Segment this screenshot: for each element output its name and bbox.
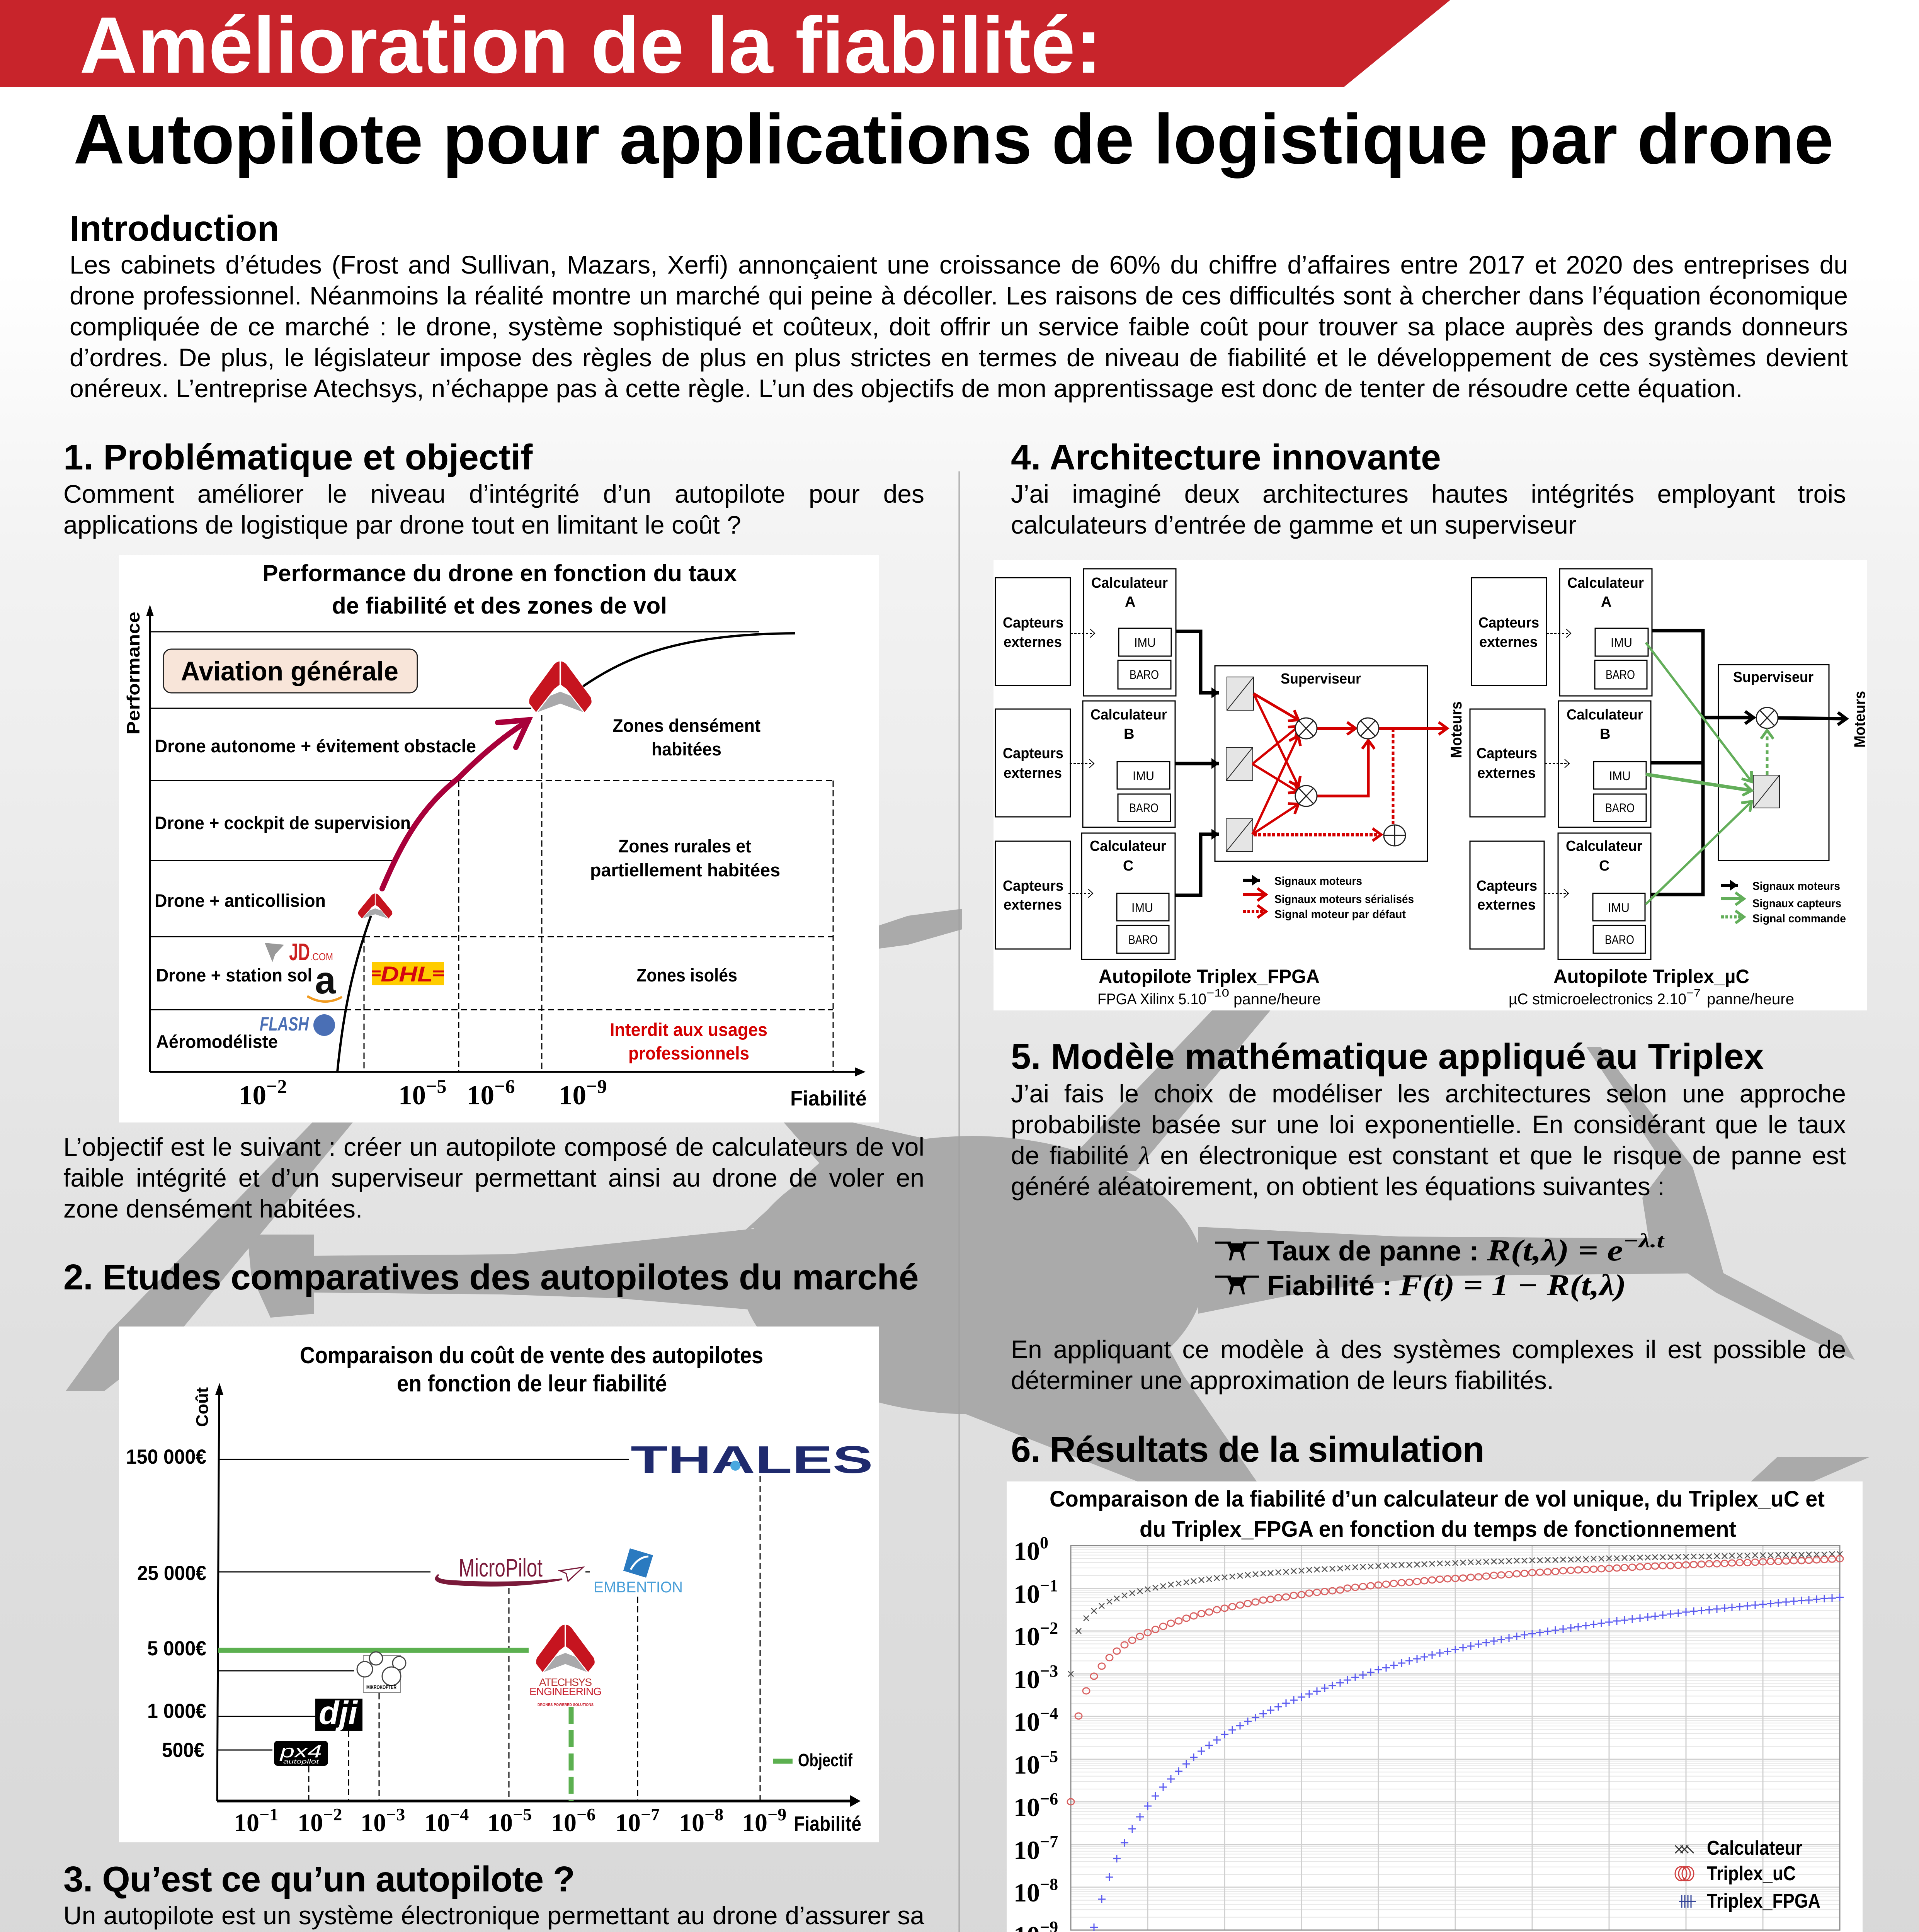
diagram: architectures triplex: BARO xyxy=(1605,933,1634,947)
legend objectif: Objectif xyxy=(798,1750,853,1770)
diagram: architectures triplex: BARO xyxy=(1130,668,1159,682)
chart: performance du drone: Drone + anticollision xyxy=(155,890,326,911)
chart: coût des autopilotes: 25 000€ xyxy=(137,1562,206,1585)
chart: performance du drone: Fiabilité xyxy=(790,1087,867,1110)
chart: coût des autopilotes: Comparaison du coût de vente des autopilotes xyxy=(300,1342,763,1368)
text: section 4 xyxy=(1011,478,1846,540)
autopilot brand logos: autopilot xyxy=(283,1759,319,1765)
y axis labels: 10 xyxy=(1014,1835,1040,1865)
series triplex uC xyxy=(1071,1559,1840,1802)
legend right: Signaux capteurs xyxy=(1752,897,1841,910)
diagram: architectures triplex: BARO xyxy=(1605,801,1635,815)
text: introduction: onéreux. L’entreprise Atechsys, n’échappe pas à cette règle. L’un des objectifs de mon apprentissage est donc de tenter de résoudre cette équation. xyxy=(70,374,1743,403)
chart: coût des autopilotes: 10 xyxy=(234,1809,259,1837)
chart: coût des autopilotes: −9 xyxy=(767,1804,786,1824)
diagram: architectures triplex: BARO xyxy=(1606,668,1635,682)
background drone silhouette xyxy=(66,909,1870,1492)
y axis labels: 10 xyxy=(1014,1707,1040,1736)
chart: coût des autopilotes: −6 xyxy=(577,1804,595,1824)
y axis labels: 0 xyxy=(1040,1533,1048,1552)
box labels: Calculateur xyxy=(1567,575,1644,591)
text: section 1 objective: L’objectif est le suivant : créer un autopilote composé de calculateurs de vol xyxy=(63,1133,924,1161)
chart: coût des autopilotes: −3 xyxy=(386,1804,405,1824)
chart: performance du drone: Drone + cockpit de supervision xyxy=(155,813,411,833)
y axis labels: 10 xyxy=(1014,1750,1040,1779)
diagram captions xyxy=(1097,966,1794,1008)
text: section 5 xyxy=(1011,1078,1846,1202)
diagram: architectures triplex: IMU xyxy=(1131,901,1153,915)
legend right xyxy=(1721,880,1846,925)
diagram captions: µC stmicroelectronics 2.10 xyxy=(1509,991,1686,1008)
equations: −λ.t xyxy=(1623,1230,1665,1252)
chart: coût des autopilotes: 10 xyxy=(551,1809,577,1837)
heading: section 4: 4. Architecture innovante xyxy=(1011,437,1441,477)
aviation générale label: Aviation générale xyxy=(181,656,398,686)
box labels: externes xyxy=(1004,634,1062,650)
chart: performance du drone: 10 xyxy=(559,1080,586,1111)
box labels: externes xyxy=(1004,765,1062,781)
aviation générale label xyxy=(163,649,417,693)
equations: Fiabilité : xyxy=(1267,1270,1392,1301)
equations: Taux de panne : xyxy=(1267,1236,1478,1267)
diagram captions: Autopilote Triplex_µC xyxy=(1553,966,1749,987)
diagram captions: −10 xyxy=(1206,987,1229,999)
box labels: B xyxy=(1124,726,1134,742)
text: section 5 conclusion: déterminer une approximation de leurs fiabilités. xyxy=(1011,1366,1554,1395)
autopilot brand logos: dji xyxy=(319,1695,358,1731)
diagram: architectures triplex xyxy=(994,560,1868,1010)
y axis labels: −1 xyxy=(1040,1576,1058,1595)
autopilot brand logos: DRONES POWERED SOLUTIONS xyxy=(538,1703,594,1707)
company logos on chart xyxy=(260,939,444,1036)
chart: résultats de simulation: Comparaison de la fiabilité d’un calculateur de vol unique, du Triplex_uC et xyxy=(1050,1486,1825,1512)
chart: coût des autopilotes: −5 xyxy=(513,1804,532,1824)
text: section 5 conclusion xyxy=(1011,1334,1846,1396)
y axis labels: −5 xyxy=(1040,1747,1058,1766)
y axis labels: 10 xyxy=(1014,1878,1040,1907)
box labels: Capteurs xyxy=(1477,745,1537,762)
chart: coût des autopilotes: −2 xyxy=(323,1804,342,1824)
right diagram signals xyxy=(1651,631,1846,895)
text: introduction: compliquée de ce marché : le drone, système sophistiqué et coûteux, doit offrir un service faible coût pour trouver sa place auprès des grands donneurs xyxy=(70,312,1848,341)
box labels: Capteurs xyxy=(1003,878,1063,894)
text: introduction: drone professionnel. Néanmoins la réalité montre un marché qui peine à décoller. Les raisons de ces difficultés sont à chercher dans l’équation économique xyxy=(70,281,1848,310)
chart: performance du drone: de fiabilité et des zones de vol xyxy=(332,593,667,619)
chart: performance du drone: Drone + station sol xyxy=(156,965,312,985)
chart: résultats de simulation xyxy=(1007,1481,1863,1932)
red growth arrow xyxy=(382,720,529,889)
chart: performance du drone: −2 xyxy=(266,1075,287,1097)
box labels: Calculateur xyxy=(1566,838,1642,854)
operator circles xyxy=(1295,707,1778,846)
chart legend: Triplex_uC xyxy=(1707,1862,1796,1885)
autopilot brand logos: ATECHSYS xyxy=(539,1676,592,1688)
chart: coût des autopilotes: −8 xyxy=(704,1804,723,1824)
y axis labels: −3 xyxy=(1040,1662,1058,1680)
chart: performance du drone: professionnels xyxy=(628,1043,749,1063)
title line 1: Amélioration de la fiabilité: xyxy=(80,0,1102,90)
text: section 5 conclusion: En appliquant ce modèle à des systèmes complexes il est possible de xyxy=(1011,1335,1846,1364)
chart: performance du drone: −6 xyxy=(494,1075,515,1097)
autopilot brand logos: px4 xyxy=(279,1741,322,1761)
box labels: externes xyxy=(1479,634,1538,650)
y axis labels: −6 xyxy=(1040,1789,1058,1808)
chart: performance du drone: Zones isolés xyxy=(636,965,737,985)
box labels: Capteurs xyxy=(1478,615,1539,631)
chart: performance du drone: Aéromodéliste xyxy=(156,1031,278,1052)
chart legend: Calculateur xyxy=(1707,1837,1802,1859)
text: section 1 objective: faible intégrité et d’un superviseur permettant ainsi au drone de voler en xyxy=(63,1163,924,1192)
chart: coût des autopilotes: 10 xyxy=(361,1809,386,1837)
box labels: C xyxy=(1123,858,1133,874)
text: section 5: probabiliste basée sur une loi exponentielle. En considérant que le taux xyxy=(1011,1110,1846,1139)
text: section 4: J’ai imaginé deux architectures hautes intégrités employant trois xyxy=(1011,480,1846,508)
chart legend: Triplex_FPGA xyxy=(1707,1890,1820,1912)
chart: performance du drone: 10 xyxy=(398,1080,426,1111)
heading: introduction: Introduction xyxy=(70,208,279,248)
diagram: architectures triplex: IMU xyxy=(1133,769,1154,783)
box labels: externes xyxy=(1004,897,1062,913)
equations xyxy=(1215,1230,1665,1302)
chart: coût des autopilotes: en fonction de leur fiabilité xyxy=(397,1371,667,1396)
text: section 1 question: Comment améliorer le niveau d’intégrité d’un autopilote pour des xyxy=(63,480,924,508)
text: section 1 objective xyxy=(63,1131,924,1224)
chart: coût des autopilotes xyxy=(119,1327,879,1842)
heading: section 6: 6. Résultats de la simulation xyxy=(1011,1429,1484,1469)
y axis labels: 10 xyxy=(1014,1793,1040,1822)
chart: performance du drone: Zones rurales et xyxy=(618,836,751,856)
autopilot brand logos: EMBENTION xyxy=(594,1579,683,1596)
diagram captions: Autopilote Triplex_FPGA xyxy=(1099,966,1320,987)
legend left xyxy=(1243,875,1414,921)
company logos on chart: .COM xyxy=(310,951,333,963)
autopilot brand logos xyxy=(274,1438,873,1766)
box labels: Calculateur xyxy=(1090,707,1167,723)
heading: section 2: 2. Etudes comparatives des autopilotes du marché xyxy=(63,1257,919,1297)
series calculateur xyxy=(1071,1554,1840,1674)
box labels: C xyxy=(1599,858,1609,874)
chart: performance du drone: 10 xyxy=(467,1080,494,1111)
chart: performance du drone: partiellement habitées xyxy=(590,860,780,880)
legend right: Signaux moteurs xyxy=(1752,880,1840,893)
chart: coût des autopilotes: 10 xyxy=(487,1809,513,1837)
text: section 3: Un autopilote est un système électronique permettant au drone d’assurer sa xyxy=(63,1901,924,1930)
chart: coût des autopilotes: 500€ xyxy=(162,1739,204,1762)
box labels: B xyxy=(1600,726,1610,742)
chart: performance du drone: −9 xyxy=(586,1075,607,1097)
y axis labels: −7 xyxy=(1040,1832,1058,1851)
text: section 5: généré aléatoirement, on obtient les équations suivantes : xyxy=(1011,1172,1664,1201)
chart legend xyxy=(1675,1837,1820,1912)
diagram: architectures triplex: IMU xyxy=(1608,901,1630,915)
legend left: Signaux moteurs xyxy=(1274,875,1362,888)
y axis labels: 10 xyxy=(1014,1579,1040,1609)
chart: résultats de simulation: du Triplex_FPGA en fonction du temps de fonctionnement xyxy=(1140,1517,1736,1542)
chart: performance du drone: 10 xyxy=(239,1080,266,1111)
diagram captions: FPGA Xilinx 5.10 xyxy=(1097,991,1206,1008)
company logos on chart: DHL xyxy=(381,962,433,986)
chart: performance du drone xyxy=(119,555,879,1122)
diagram: architectures triplex: IMU xyxy=(1134,636,1156,650)
text: section 1 question xyxy=(63,478,924,540)
diagram: architectures triplex: BARO xyxy=(1129,801,1159,815)
y axis labels xyxy=(1014,1533,1058,1932)
diagram: architectures triplex: Moteurs xyxy=(1851,691,1868,748)
y axis labels: −2 xyxy=(1040,1619,1058,1638)
equations: R(t,λ) = e xyxy=(1487,1233,1623,1267)
box labels xyxy=(1003,575,1814,913)
diagram captions: −7 xyxy=(1686,987,1701,999)
box labels: Capteurs xyxy=(1003,615,1063,631)
chart: performance du drone: Performance du drone en fonction du taux xyxy=(262,560,737,586)
text: section 1 question: applications de logistique par drone tout en limitant le coût ? xyxy=(63,510,741,539)
chart: coût des autopilotes: −1 xyxy=(259,1804,278,1824)
chart: coût des autopilotes: Fiabilité xyxy=(794,1812,861,1835)
box labels: externes xyxy=(1477,765,1536,781)
y axis labels: −4 xyxy=(1040,1704,1058,1723)
legend left: Signal moteur par défaut xyxy=(1274,908,1406,921)
diagram: architectures triplex: IMU xyxy=(1609,769,1631,783)
text: introduction: d’ordres. De plus, le législateur impose des règles de plus en plus strictes en termes de niveau de fiabilité et le développement de ces systèmes devient xyxy=(70,343,1848,372)
y axis labels: 10 xyxy=(1014,1665,1040,1694)
box labels: Superviseur xyxy=(1733,669,1814,685)
box labels: A xyxy=(1601,594,1611,610)
company logos on chart: JD xyxy=(289,939,310,966)
red title banner xyxy=(0,0,1450,87)
chart: coût des autopilotes: 150 000€ xyxy=(126,1446,206,1468)
autopilot brand logos: ENGINEERING xyxy=(529,1685,602,1697)
chart: coût des autopilotes: Coût xyxy=(193,1387,212,1427)
title line 2: Autopilote pour applications de logistique par drone xyxy=(73,99,1834,179)
chart: coût des autopilotes: 1 000€ xyxy=(147,1700,206,1723)
red signal lines xyxy=(1252,694,1447,835)
autopilot brand logos: THALES xyxy=(631,1438,873,1481)
text: introduction xyxy=(70,249,1848,404)
chart: coût des autopilotes: 10 xyxy=(679,1809,704,1837)
text: introduction: Les cabinets d’études (Frost and Sullivan, Mazars, Xerfi) annonçaient une croissance de 60% du chiffre d’affaires entre 2017 et 2020 des entreprises du xyxy=(70,250,1848,279)
text: section 5: J’ai fais le choix de modéliser les architectures selon une approche xyxy=(1011,1079,1846,1108)
diagram captions: panne/heure xyxy=(1707,991,1794,1008)
heading: section 5: 5. Modèle mathématique appliqué au Triplex xyxy=(1011,1036,1764,1077)
chart: performance du drone: Drone autonome + évitement obstacle xyxy=(155,736,476,756)
text: section 5: de fiabilité λ en électronique est constant et que le risque de panne est xyxy=(1011,1141,1846,1170)
objective lines xyxy=(218,1650,571,1801)
series triplex FPGA xyxy=(1094,1597,1840,1927)
chart: performance du drone: Zones densément xyxy=(612,715,760,736)
text: section 4: calculateurs d’entrée de gamme et un superviseur xyxy=(1011,510,1577,539)
legend left: Signaux moteurs sérialisés xyxy=(1274,893,1414,906)
chart: performance du drone: −5 xyxy=(426,1075,447,1097)
black signal lines left xyxy=(1175,631,1219,895)
autopilot brand logos: MicroPilot xyxy=(459,1553,543,1582)
company logos on chart: FLASH xyxy=(260,1013,309,1035)
chart: coût des autopilotes: 10 xyxy=(298,1809,323,1837)
diagram: architectures triplex: BARO xyxy=(1128,933,1158,947)
box labels: Superviseur xyxy=(1281,671,1361,687)
box labels: externes xyxy=(1477,897,1536,913)
equations: F(t) = 1 − R(t,λ) xyxy=(1399,1268,1626,1302)
box labels: Capteurs xyxy=(1477,878,1537,894)
chart: performance du drone: Interdit aux usages xyxy=(610,1019,767,1040)
heading: section 3: 3. Qu’est ce qu’un autopilote ? xyxy=(63,1859,575,1899)
chart: coût des autopilotes: 5 000€ xyxy=(147,1637,206,1660)
chart: coût des autopilotes: 10 xyxy=(615,1809,641,1837)
chart: coût des autopilotes: 10 xyxy=(742,1809,767,1837)
box labels: Calculateur xyxy=(1090,838,1166,854)
autopilot brand logos: MIKROKOPTER xyxy=(366,1684,396,1690)
chart: coût des autopilotes: 10 xyxy=(424,1809,450,1837)
diagram captions: panne/heure xyxy=(1233,991,1321,1008)
chart: performance du drone: habitées xyxy=(652,739,721,759)
box labels: Capteurs xyxy=(1003,745,1063,762)
chart: coût des autopilotes: −4 xyxy=(450,1804,469,1824)
legend right: Signal commande xyxy=(1752,912,1846,925)
sensor dotted arrows xyxy=(1068,633,1571,893)
company logos on chart: a xyxy=(315,959,336,1002)
diagram: architectures triplex: IMU xyxy=(1611,636,1632,650)
chart: performance du drone: Performance xyxy=(123,612,143,735)
column divider xyxy=(958,471,960,1932)
y axis labels: −8 xyxy=(1040,1875,1058,1894)
chart: coût des autopilotes: −7 xyxy=(641,1804,660,1824)
boxes capteurs and calculateurs xyxy=(995,569,1829,959)
box labels: Calculateur xyxy=(1567,707,1643,723)
text: section 1 objective: zone densément habitées. xyxy=(63,1194,362,1223)
box labels: Calculateur xyxy=(1091,575,1168,591)
diagram: architectures triplex: Moteurs xyxy=(1448,701,1465,758)
heading: section 1: 1. Problématique et objectif xyxy=(63,437,532,477)
serializers left xyxy=(1226,677,1779,852)
y axis labels: 10 xyxy=(1014,1536,1040,1566)
box labels: A xyxy=(1125,594,1135,610)
y axis labels: 10 xyxy=(1014,1622,1040,1651)
